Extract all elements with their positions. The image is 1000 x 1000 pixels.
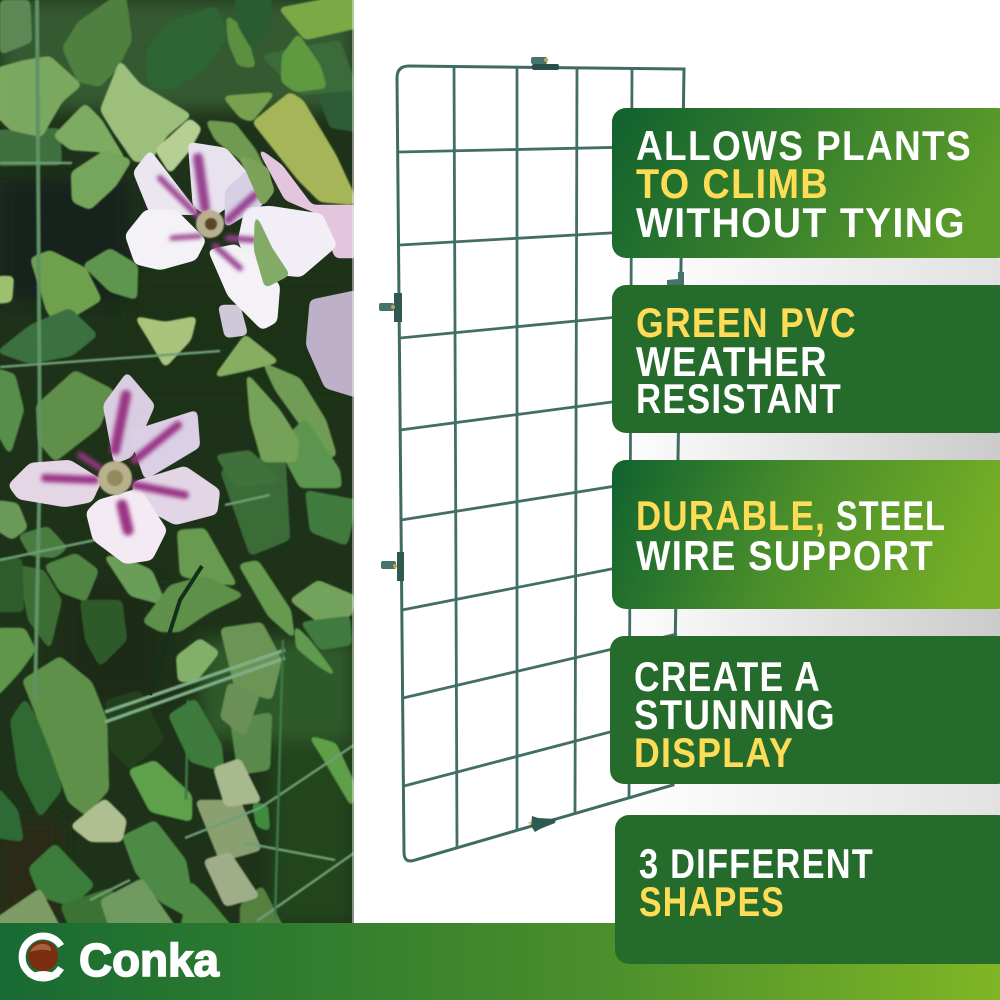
clip: bottom [528, 816, 556, 832]
panel text: 3 different shapes [639, 840, 874, 925]
panel: green PVC [612, 285, 1000, 433]
logo wordmark: Conka [79, 934, 219, 986]
clip: right [667, 272, 684, 285]
panel text: allows plants to climb without tying: WITHOUT TYING [636, 199, 966, 246]
logo icon [22, 936, 61, 981]
clip: lower left [381, 552, 404, 581]
logo: Conka [22, 934, 219, 986]
panel: different shapes [615, 815, 1000, 964]
panel text: allows plants to climb without tying [636, 122, 972, 246]
flower: lower clematis [8, 372, 220, 564]
panel text: durable, steel wire support: DURABLE, [636, 492, 826, 539]
panel text: green PVC weather resistant: GREEN PVC [636, 299, 857, 346]
panel text: allows plants to climb without tying: TO CLIMB [636, 160, 829, 207]
panel: durable steel wire [612, 460, 1000, 609]
clip: upper left [379, 293, 402, 322]
background shadow bands between panels [612, 258, 1000, 815]
cable tie [150, 566, 202, 695]
panel text: green PVC weather resistant [636, 299, 857, 422]
panel text: green PVC weather resistant: WEATHER [636, 338, 828, 385]
panel text: create a stunning display: STUNNING [634, 691, 836, 738]
panel: stunning display [610, 636, 1000, 784]
panel text: 3 different shapes: SHAPES [639, 878, 785, 925]
panel text: durable, steel wire support: STEEL [836, 492, 946, 539]
product: green wire trellis panel [379, 57, 684, 861]
footer band [0, 923, 1000, 1000]
clip: top [531, 57, 559, 70]
flower: upper clematis [125, 142, 358, 398]
photo edge [352, 0, 354, 923]
trellis wires in the photo [0, 0, 354, 921]
panel text: durable, steel wire support: WIRE SUPPORT [636, 532, 934, 579]
panel: allows plants to climb [612, 108, 1000, 258]
photo: clematis flowers and leaves climbing a green trellis [0, 0, 358, 930]
panel text: 3 different shapes: 3 DIFFERENT [639, 840, 874, 887]
panel text: green PVC weather resistant: RESISTANT [636, 375, 842, 422]
panel text: create a stunning display: DISPLAY [634, 729, 794, 776]
panel text: create a stunning display: CREATE A [634, 653, 821, 700]
panel text: durable, steel wire support [636, 492, 946, 579]
panel text: create a stunning display [634, 653, 836, 776]
